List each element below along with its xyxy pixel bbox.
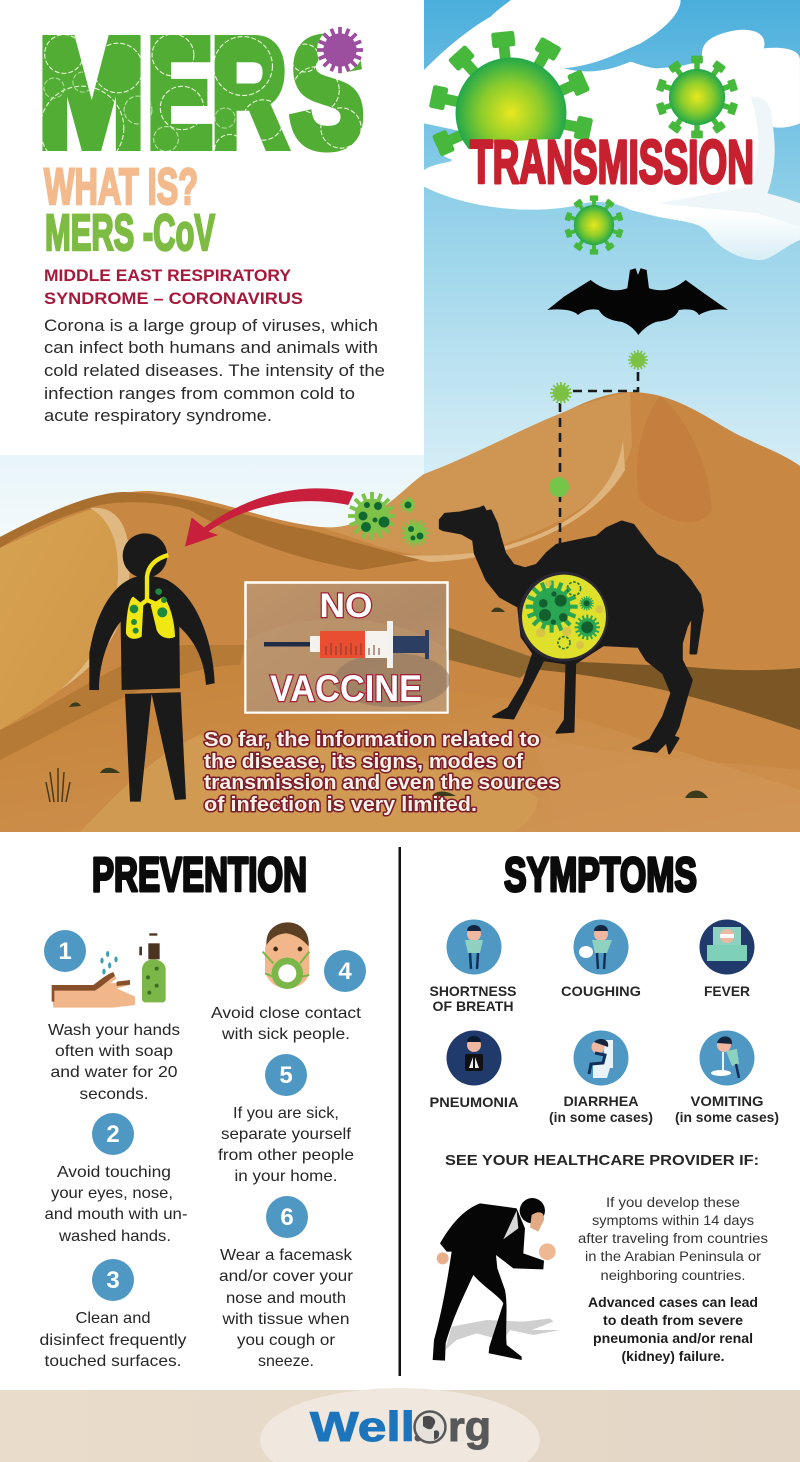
text: travel warning: If you develop these: [606, 1195, 740, 1210]
icon: coughing: [574, 920, 628, 974]
icon: bat: [547, 268, 728, 335]
text: step 6: sneeze.: [258, 1353, 314, 1370]
icon: face with mask: [263, 922, 309, 988]
text: corona description: acute respiratory syndrome.: [44, 406, 272, 425]
text: step 6: nose and mouth: [226, 1290, 346, 1307]
icon: camel: [440, 507, 703, 753]
step 4 badge: 4: [338, 958, 352, 985]
logo: MERS: M: [38, 7, 145, 179]
text: step 2: washed hands.: [58, 1228, 171, 1245]
step 1 badge: [44, 930, 86, 972]
text: step 1: often with soap: [55, 1043, 173, 1060]
text: step 3: touched surfaces.: [44, 1353, 182, 1370]
logo: MERS: [38, 7, 364, 179]
text: corona description: cold related diseases. The intensity of the: [44, 361, 385, 380]
logo: Well.Org: [310, 1403, 491, 1450]
text: step 3: Clean and: [76, 1310, 150, 1327]
step 3 badge: [92, 1259, 134, 1301]
logo: MERS: R: [211, 7, 287, 179]
text: limited information: transmission and even the sources: [204, 772, 560, 794]
text: step 5: If you are sick,: [233, 1105, 339, 1122]
text: travel warning: neighboring countries.: [600, 1268, 746, 1283]
label: fever: FEVER: [704, 983, 750, 999]
logo: MERS: E: [147, 7, 213, 179]
text: step 5: separate yourself: [221, 1126, 352, 1143]
icon: infected person: [89, 533, 215, 802]
label: diarrhea: DIARRHEA: [564, 1093, 638, 1109]
text: advanced cases: (kidney) failure.: [622, 1349, 724, 1364]
icon: hand washing: [52, 933, 166, 1008]
label: shortness of breath: [430, 983, 516, 1014]
transmission path: dashed line: [560, 372, 638, 545]
subheading: full name: SYNDROME – CORONAVIRUS: [44, 289, 303, 308]
step 4 badge: [324, 950, 366, 992]
text: step 6: you cough or: [237, 1332, 336, 1349]
text: limited information: [204, 729, 560, 816]
label: vaccine: VACCINE: [270, 668, 422, 709]
step 3 badge: 3: [106, 1267, 120, 1294]
text: step 1: seconds.: [80, 1086, 148, 1103]
step 2 badge: 2: [106, 1121, 120, 1148]
text: corona description: can infect both humans and animals with: [44, 338, 378, 357]
text: step 5: from other people: [218, 1147, 354, 1164]
step 5 badge: [265, 1054, 307, 1096]
clouds: [424, 0, 800, 260]
subheading: full name: [44, 266, 303, 308]
background: lower-left sky: [0, 455, 424, 605]
text: step 4: with sick people.: [221, 1026, 350, 1043]
virus: transmission dots: [549, 350, 648, 497]
text: advanced cases: [588, 1295, 758, 1364]
text: step 6: [219, 1247, 354, 1370]
text: limited information: the disease, its signs, modes of: [204, 751, 523, 773]
text: step 2: and mouth with un-: [44, 1206, 188, 1223]
text: step 3: [40, 1310, 186, 1370]
text: step 6: Wear a facemask: [220, 1247, 353, 1264]
text: step 4: Avoid close contact: [211, 1005, 362, 1022]
text: step 3: disinfect frequently: [40, 1332, 186, 1349]
virus: small: [564, 195, 624, 255]
label: coughing: COUGHING: [561, 983, 641, 999]
text: step 2: Avoid touching: [57, 1164, 171, 1181]
icon: fever: [700, 920, 754, 974]
step 1 badge: 1: [58, 938, 72, 965]
icon: purple virus: [317, 27, 363, 73]
text: advanced cases: to death from severe: [603, 1313, 744, 1328]
icon: shortness of breath: [446, 920, 502, 974]
step 6 badge: 6: [280, 1204, 294, 1231]
icon: diarrhea: [574, 1030, 628, 1086]
arrow: camel to person: [185, 488, 354, 547]
desert dunes: [0, 392, 800, 832]
logo: MERS: S: [290, 7, 364, 179]
text: step 1: [48, 1022, 180, 1103]
divider: [398, 847, 401, 1376]
text: limited information: of infection is very limited.: [204, 794, 477, 816]
text: corona description: Corona is a large group of viruses, which: [44, 316, 378, 335]
cloud covering large virus base: [445, 139, 720, 205]
heading: symptoms: SYMPTOMS: [504, 849, 697, 902]
heading: prevention: PREVENTION: [92, 849, 307, 902]
label: diarrhea: (in some cases): [549, 1109, 653, 1125]
heading: see your healthcare provider: SEE YOUR HEALTHCARE PROVIDER IF:: [445, 1152, 759, 1169]
icon: vomiting: [700, 1030, 754, 1086]
text: limited information: So far, the information related to: [204, 729, 540, 751]
camel belly virus window: [518, 572, 608, 662]
text: travel warning: symptoms within 14 days: [592, 1213, 754, 1228]
label: diarrhea: [549, 1093, 653, 1125]
footer band: [0, 1388, 800, 1462]
text: step 5: [218, 1105, 354, 1185]
label: vomiting: VOMITING: [690, 1093, 764, 1109]
icon: syringe: [264, 621, 429, 668]
subheading: full name: MIDDLE EAST RESPIRATORY: [44, 266, 292, 285]
logo: Well.Org: rg: [448, 1403, 491, 1450]
lungs: [126, 555, 175, 639]
label: vomiting: (in some cases): [675, 1109, 779, 1125]
viruses exhaled by camel: [348, 492, 429, 547]
grass tufts: [46, 608, 708, 802]
text: step 1: and water for 20: [50, 1064, 178, 1081]
text: step 6: with tissue when: [221, 1311, 350, 1328]
label: vomiting: [675, 1093, 779, 1125]
text: step 6: and/or cover your: [219, 1268, 354, 1285]
background: sky: [424, 0, 800, 560]
label: no: NO: [320, 587, 372, 625]
label: pneumonia: PNEUMONIA: [430, 1094, 518, 1110]
text: step 1: Wash your hands: [48, 1022, 180, 1039]
text: step 5: in your home.: [234, 1168, 338, 1185]
label: shortness of breath: SHORTNESS: [430, 983, 516, 999]
step 2 badge: [92, 1113, 134, 1155]
text: travel warning: in the Arabian Peninsula or: [585, 1249, 762, 1264]
heading: MERS-CoV: MERS -CoV: [45, 204, 215, 261]
heading: what is: WHAT IS?: [44, 158, 198, 215]
icon: pneumonia: [446, 1030, 502, 1086]
icon: sick man: [433, 1198, 560, 1361]
text: step 2: your eyes, nose,: [51, 1185, 173, 1202]
text: travel warning: after traveling from countries: [578, 1231, 768, 1246]
panel: lower white background: [0, 832, 800, 1390]
text: travel warning: [578, 1195, 768, 1283]
virus: medium: [656, 56, 738, 138]
step 6 badge: [266, 1196, 308, 1238]
panel: intro white background: [0, 0, 424, 455]
label: shortness of breath: OF BREATH: [432, 998, 514, 1014]
text: step 4: [211, 1005, 362, 1043]
logo: Well.Org: Well: [310, 1403, 415, 1450]
text: corona description: infection ranges from common cold to: [44, 384, 355, 403]
text: advanced cases: pneumonia and/or renal: [593, 1331, 753, 1346]
step 5 badge: 5: [279, 1062, 293, 1089]
text: advanced cases: Advanced cases can lead: [588, 1295, 758, 1310]
text: corona description: [44, 316, 385, 425]
panel: no vaccine: [246, 582, 450, 712]
text: step 2: [44, 1164, 188, 1245]
virus: large: [422, 23, 600, 203]
